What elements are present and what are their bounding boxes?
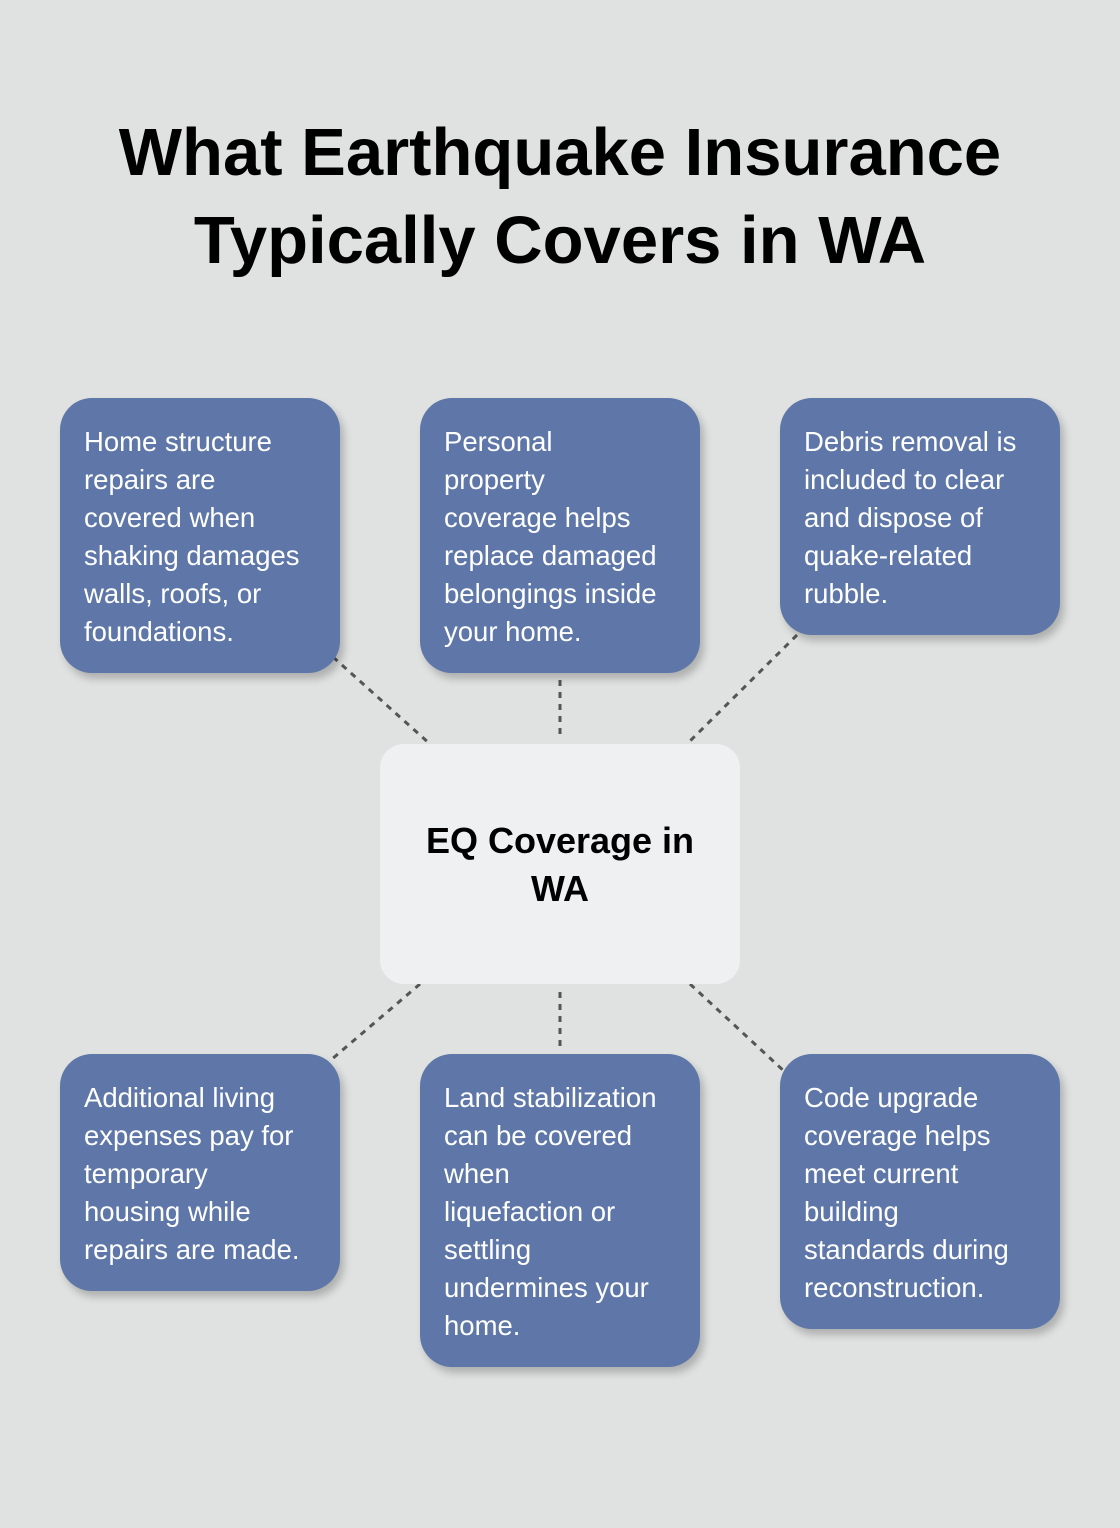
box: land stabilization: can be covered: [444, 1120, 632, 1151]
box: personal property: property: [444, 464, 545, 495]
box: debris removal: rubble.: [804, 578, 888, 609]
box: personal property: your home.: [444, 616, 582, 647]
box: living expenses: Additional living: [84, 1082, 275, 1113]
box: home structure: [60, 398, 340, 673]
box: personal property: belongings inside: [444, 578, 657, 609]
box: home structure: covered when: [84, 502, 255, 533]
box: home structure: foundations.: [84, 616, 234, 647]
box: land stabilization: [420, 1054, 700, 1367]
box: code upgrade: standards during: [804, 1234, 1009, 1265]
box: living expenses: expenses pay for: [84, 1120, 293, 1151]
box: land stabilization: Land stabilization: [444, 1082, 657, 1113]
box: personal property: replace damaged: [444, 540, 657, 571]
box: code upgrade: [780, 1054, 1060, 1329]
title: What Earthquake Insurance: [119, 115, 1001, 190]
center hub: EQ Coverage in: [426, 820, 694, 861]
title: [118, 115, 1001, 278]
center hub: WA: [531, 868, 589, 909]
box: home structure: shaking damages: [84, 540, 300, 571]
box: land stabilization: undermines your: [444, 1272, 649, 1303]
box: living expenses: [60, 1054, 340, 1291]
box: personal property: coverage helps: [444, 502, 631, 533]
box: home structure: walls, roofs, or: [84, 578, 261, 609]
box: code upgrade: reconstruction.: [804, 1272, 984, 1303]
box: code upgrade: meet current: [804, 1158, 958, 1189]
box: land stabilization: liquefaction or: [444, 1196, 615, 1227]
box: living expenses: temporary: [84, 1158, 208, 1189]
box: debris removal: [780, 398, 1060, 635]
title: Typically Covers in WA: [194, 203, 926, 278]
box: debris removal: and dispose of: [804, 502, 983, 533]
center hub: [380, 744, 740, 984]
box: code upgrade: coverage helps: [804, 1120, 991, 1151]
box: debris removal: included to clear: [804, 464, 1004, 495]
box: personal property: Personal: [444, 426, 553, 457]
box: land stabilization: settling: [444, 1234, 531, 1265]
box: personal property: [420, 398, 700, 673]
box: land stabilization: home.: [444, 1310, 520, 1341]
box: home structure: Home structure: [84, 426, 272, 457]
box: home structure: repairs are: [84, 464, 215, 495]
box: debris removal: quake-related: [804, 540, 972, 571]
box: debris removal: Debris removal is: [804, 426, 1016, 457]
box: living expenses: housing while: [84, 1196, 251, 1227]
box: living expenses: repairs are made.: [84, 1234, 300, 1265]
box: code upgrade: Code upgrade: [804, 1082, 978, 1113]
box: code upgrade: building: [804, 1196, 899, 1227]
box: land stabilization: when: [444, 1158, 510, 1189]
